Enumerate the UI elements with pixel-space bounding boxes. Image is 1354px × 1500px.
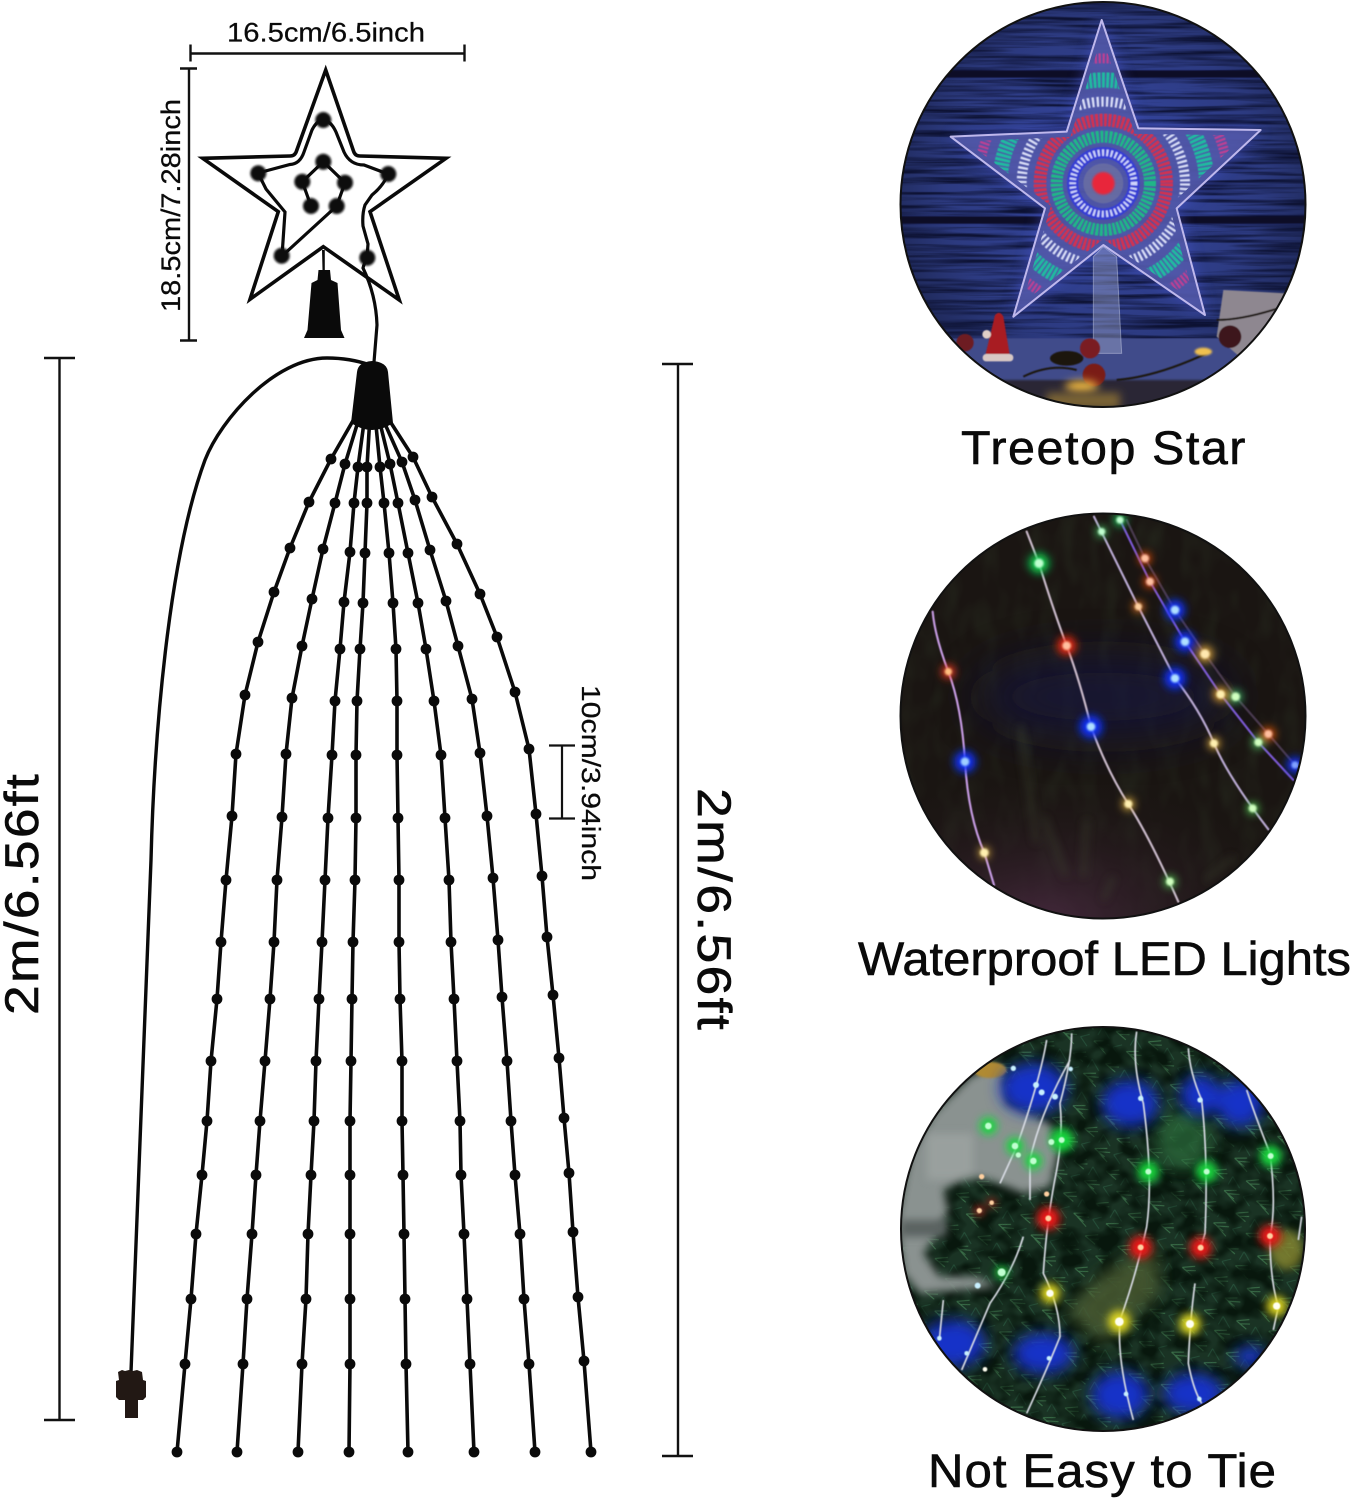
LED halos [975,1117,1287,1335]
star body [951,20,1261,317]
dimension: string length: 2m/6.56ft [688,788,741,1032]
blurred room background [897,1063,1058,1293]
dimension: bead spacing: 10cm/3.94inch [576,685,606,881]
icon: plug [116,1370,146,1418]
santa hat ornament [956,313,1013,361]
LED cores [945,516,1299,886]
warm glow [1047,348,1212,409]
dimension: string length [662,364,741,1456]
table surface [952,338,1238,382]
star base stake [304,250,344,338]
star light rings [978,58,1228,308]
dimension: star width: 16.5cm/6.5inch [227,18,425,48]
photo: waterproof LED strings at night [900,512,1308,922]
star glow [951,20,1261,317]
silver wires [939,1032,1302,1420]
label: Not Easy to Tie: Not Easy to Tie [928,1444,1277,1497]
power cable and plug [116,358,370,1418]
photo: lit treetop star on wood [890,0,1323,418]
diagram: treetop star outline [203,70,446,362]
photo: strings on a Christmas tree [897,1025,1308,1435]
dimension: star height [156,68,197,340]
LED glow [942,514,1303,888]
star core [1092,172,1115,195]
star inner wire [258,120,388,362]
berries and branch [1023,338,1207,386]
dimension: star height: 18.5cm/7.28inch [156,99,186,312]
blue glow patches [922,1063,1265,1418]
wire strands [933,517,1295,902]
dimension: left cable length [0,358,75,1420]
light pine branches [1157,1110,1210,1170]
LED cores [937,1066,1280,1401]
control box hub [351,361,393,430]
dimension: star width [190,18,464,62]
light strings with LED beads [177,412,591,1452]
star stand [1093,247,1122,353]
night blue haze [977,657,1230,737]
label: Treetop Star: Treetop Star [961,421,1247,474]
dimension: bead spacing [549,685,606,881]
star LED bulbs [250,112,396,266]
star outer frame [203,70,446,300]
grass blades [1020,732,1230,890]
gift box [1217,290,1287,360]
wood plank gaps [890,74,1323,220]
label: Waterproof LED Lights: Waterproof LED Lights [858,932,1351,985]
